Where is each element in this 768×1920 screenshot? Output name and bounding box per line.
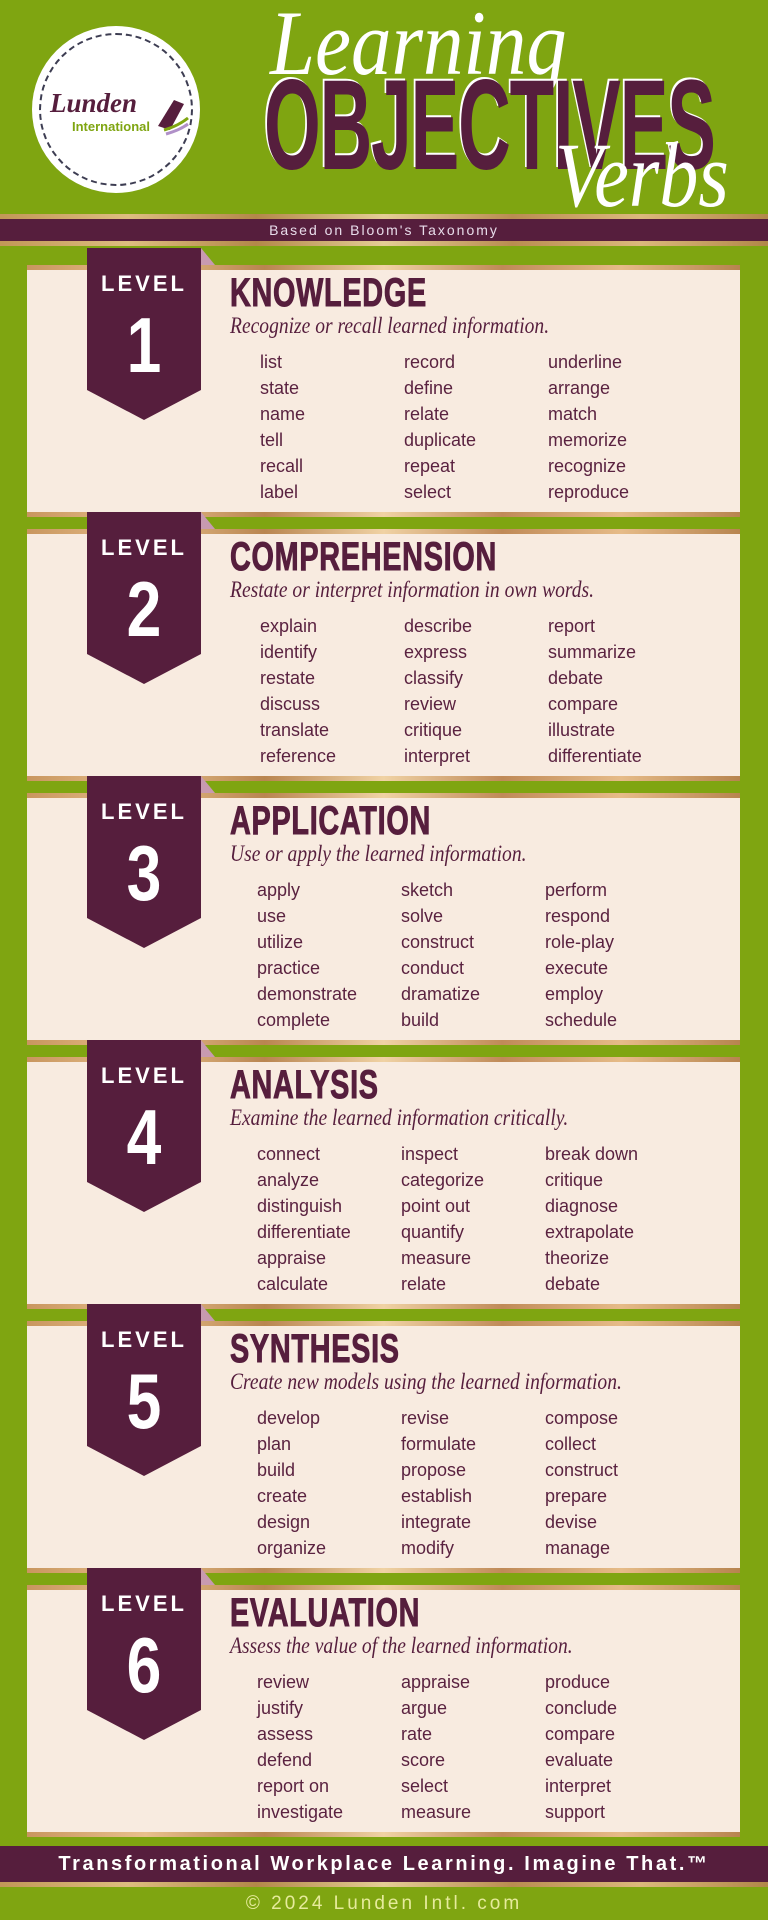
tab: level 3: LEVEL [101, 799, 187, 824]
panel: level 4 analysis: break down [545, 1144, 638, 1164]
tab: level 1: LEVEL [101, 271, 187, 296]
panel: level 3 application: respond [545, 906, 610, 926]
tab: level 4: 4 [127, 1093, 161, 1181]
subtitle band: Based on Bloom's Taxonomy [269, 222, 499, 238]
verb list: apply [257, 880, 300, 900]
panel: level 3 application: schedule [545, 1010, 617, 1030]
panel: level 3 application: role-play [545, 932, 614, 952]
panel: level 1 knowledge: arrange [548, 378, 610, 398]
verb list: review [257, 1672, 309, 1692]
description: Assess the value of the learned information. [230, 1633, 573, 1658]
panel: level 6 evaluation: support [545, 1802, 605, 1822]
verb list: discuss [260, 694, 320, 714]
tab: level 3 [87, 776, 215, 948]
tab: level 5: LEVEL [101, 1327, 187, 1352]
panel: level 5 synthesis: integrate [401, 1512, 471, 1532]
panel: level 3 application: solve [401, 906, 443, 926]
verb list: practice [257, 958, 320, 978]
panel: level 1 knowledge: record [404, 352, 455, 372]
panel: level 5 synthesis: modify [401, 1538, 454, 1558]
verb list: complete [257, 1010, 330, 1030]
panel: level 3 application: construct [401, 932, 474, 952]
panel: level 3 application: conduct [401, 958, 464, 978]
verb list: organize [257, 1538, 326, 1558]
footer tagline band: Transformational Workplace Learning. Imagine That.™ [58, 1853, 710, 1875]
heading: ANALYSIS [230, 1063, 379, 1107]
verb list [257, 1144, 351, 1294]
panel: level 6 evaluation [27, 1585, 740, 1837]
verb list: assess [257, 1724, 313, 1744]
verb list: use [257, 906, 286, 926]
panel: level 1 knowledge: memorize [548, 430, 627, 450]
panel: level 4 analysis: diagnose [545, 1196, 618, 1216]
panel: level 4 analysis: inspect [401, 1144, 458, 1164]
tab: level 4 [87, 1040, 215, 1212]
tab: level 6: 6 [127, 1621, 161, 1709]
panel: level 3 application: perform [545, 880, 607, 900]
verb list: analyze [257, 1170, 319, 1190]
logo: Lunden [50, 88, 137, 118]
verb list: differentiate [257, 1222, 351, 1242]
verb list: connect [257, 1144, 320, 1164]
tab: level 5: 5 [127, 1357, 161, 1445]
verb list: list [260, 352, 282, 372]
panel: level 4 analysis: quantify [401, 1222, 464, 1242]
verb list: utilize [257, 932, 303, 952]
panel: level 4 analysis: debate [545, 1274, 600, 1294]
heading: COMPREHENSION [230, 535, 497, 579]
verb list [257, 1408, 326, 1558]
verb list: build [257, 1460, 295, 1480]
panel: level 6 evaluation: score [401, 1750, 445, 1770]
tab: level 2: LEVEL [101, 535, 187, 560]
logo: International [72, 119, 150, 134]
copyright: © 2024 Lunden Intl. com [246, 1893, 522, 1914]
verb list [256, 1672, 343, 1822]
tab: level 1: 1 [127, 301, 161, 389]
description: Create new models using the learned information. [230, 1369, 622, 1394]
panel: level 1 knowledge: duplicate [404, 430, 476, 450]
description: Examine the learned information critically. [230, 1105, 568, 1130]
panel: level 2 comprehension: review [404, 694, 456, 714]
panel: level 2 comprehension: compare [548, 694, 618, 714]
description: Recognize or recall learned information. [230, 313, 549, 338]
verb list: reference [260, 746, 336, 766]
verb list: tell [260, 430, 283, 450]
footer tagline band [0, 1846, 768, 1882]
verb list: recall [260, 456, 303, 476]
tab: level 1 [87, 248, 215, 420]
panel: level 4 analysis: theorize [545, 1248, 609, 1268]
panel: level 5 synthesis: establish [401, 1486, 472, 1506]
verb list: distinguish [257, 1196, 342, 1216]
verb list: state [260, 378, 299, 398]
panel: level 4 analysis: measure [401, 1248, 471, 1268]
subtitle band [0, 219, 768, 241]
panel: level 5 synthesis: revise [401, 1408, 449, 1428]
verb list: demonstrate [257, 984, 357, 1004]
verb list: translate [260, 720, 329, 740]
panel: level 4 analysis: critique [545, 1170, 603, 1190]
verb list: name [260, 404, 305, 424]
panel: level 6 evaluation: produce [545, 1672, 610, 1692]
verb list [260, 352, 305, 502]
verb list: develop [257, 1408, 320, 1428]
panel: level 2 comprehension: illustrate [548, 720, 615, 740]
panel: level 4 analysis: categorize [401, 1170, 484, 1190]
panel: level 6 evaluation: conclude [545, 1698, 617, 1718]
description: Use or apply the learned information. [230, 841, 526, 866]
panel: level 6 evaluation: rate [401, 1724, 432, 1744]
panel: level 2 comprehension: summarize [548, 642, 636, 662]
panel: level 1 knowledge: recognize [548, 456, 626, 476]
panel: level 2 comprehension: debate [548, 668, 603, 688]
verb list: justify [257, 1698, 303, 1718]
verb list: calculate [257, 1274, 328, 1294]
panel: level 5 synthesis [27, 1321, 740, 1573]
verb list: restate [260, 668, 315, 688]
verb list: investigate [257, 1802, 343, 1822]
verb list: report on [257, 1776, 329, 1796]
panel: level 5 synthesis: formulate [401, 1434, 476, 1454]
panel: level 1 knowledge: repeat [404, 456, 455, 476]
panel: level 5 synthesis: manage [545, 1538, 610, 1558]
heading: KNOWLEDGE [230, 271, 427, 315]
panel: level 2 comprehension: express [404, 642, 467, 662]
verb list: create [257, 1486, 307, 1506]
panel: level 6 evaluation: measure [401, 1802, 471, 1822]
verb list: label [260, 482, 298, 502]
heading: SYNTHESIS [230, 1327, 400, 1371]
panel: level 6 evaluation: select [401, 1776, 448, 1796]
heading: APPLICATION [230, 799, 431, 843]
panel: level 1 knowledge: relate [404, 404, 449, 424]
heading: EVALUATION [230, 1591, 420, 1635]
verb list: appraise [257, 1248, 326, 1268]
panel: level 1 knowledge: match [548, 404, 597, 424]
description: Restate or interpret information in own words. [230, 577, 594, 602]
verb list [260, 616, 336, 766]
panel: level 4 analysis [27, 1057, 740, 1309]
panel: level 6 evaluation: appraise [401, 1672, 470, 1692]
panel: level 4 analysis: relate [401, 1274, 446, 1294]
tab: level 6: LEVEL [101, 1591, 187, 1616]
tab: level 3: 3 [127, 829, 161, 917]
panel: level 6 evaluation: argue [401, 1698, 447, 1718]
panel: level 2 comprehension: classify [404, 668, 463, 688]
panel: level 2 comprehension: interpret [404, 746, 470, 766]
title: Verbs [555, 124, 729, 226]
verb list: identify [260, 642, 317, 662]
panel: level 2 comprehension: report [548, 616, 595, 636]
panel: level 5 synthesis: compose [545, 1408, 618, 1428]
panel: level 3 application: build [401, 1010, 439, 1030]
verb list [257, 880, 357, 1030]
panel: level 4 analysis: extrapolate [545, 1222, 634, 1242]
panel: level 3 application: sketch [401, 880, 453, 900]
verb list: plan [257, 1434, 291, 1454]
panel: level 2 comprehension [27, 529, 740, 781]
panel: level 5 synthesis: collect [545, 1434, 596, 1454]
panel: level 2 comprehension: differentiate [548, 746, 642, 766]
panel: level 1 knowledge: define [404, 378, 453, 398]
tab: level 4: LEVEL [101, 1063, 187, 1088]
panel: level 5 synthesis: construct [545, 1460, 618, 1480]
panel: level 1 knowledge [27, 265, 740, 517]
verb list: explain [260, 616, 317, 636]
panel: level 5 synthesis: prepare [545, 1486, 607, 1506]
panel: level 1 knowledge: underline [548, 352, 622, 372]
panel: level 4 analysis: point out [401, 1196, 470, 1216]
panel: level 1 knowledge: select [404, 482, 451, 502]
panel: level 6 evaluation: evaluate [545, 1750, 613, 1770]
panel: level 5 synthesis: propose [401, 1460, 466, 1480]
verb list: design [257, 1512, 310, 1532]
panel: level 2 comprehension: critique [404, 720, 462, 740]
panel: level 2 comprehension: describe [404, 616, 472, 636]
panel: level 6 evaluation: compare [545, 1724, 615, 1744]
title [264, 0, 729, 226]
title: OBJECTIVES [264, 54, 715, 197]
panel: level 5 synthesis: devise [545, 1512, 597, 1532]
panel: level 3 application: dramatize [401, 984, 480, 1004]
tab: level 5 [87, 1304, 215, 1476]
tab: level 2: 2 [127, 565, 161, 653]
panel: level 3 application [27, 793, 740, 1045]
tab: level 2 [87, 512, 215, 684]
logo [32, 26, 200, 193]
panel: level 6 evaluation: interpret [545, 1776, 611, 1796]
verb list: defend [257, 1750, 312, 1770]
panel: level 3 application: employ [545, 984, 603, 1004]
tab: level 6 [87, 1568, 215, 1740]
panel: level 3 application: execute [545, 958, 608, 978]
panel: level 1 knowledge: reproduce [548, 482, 629, 502]
